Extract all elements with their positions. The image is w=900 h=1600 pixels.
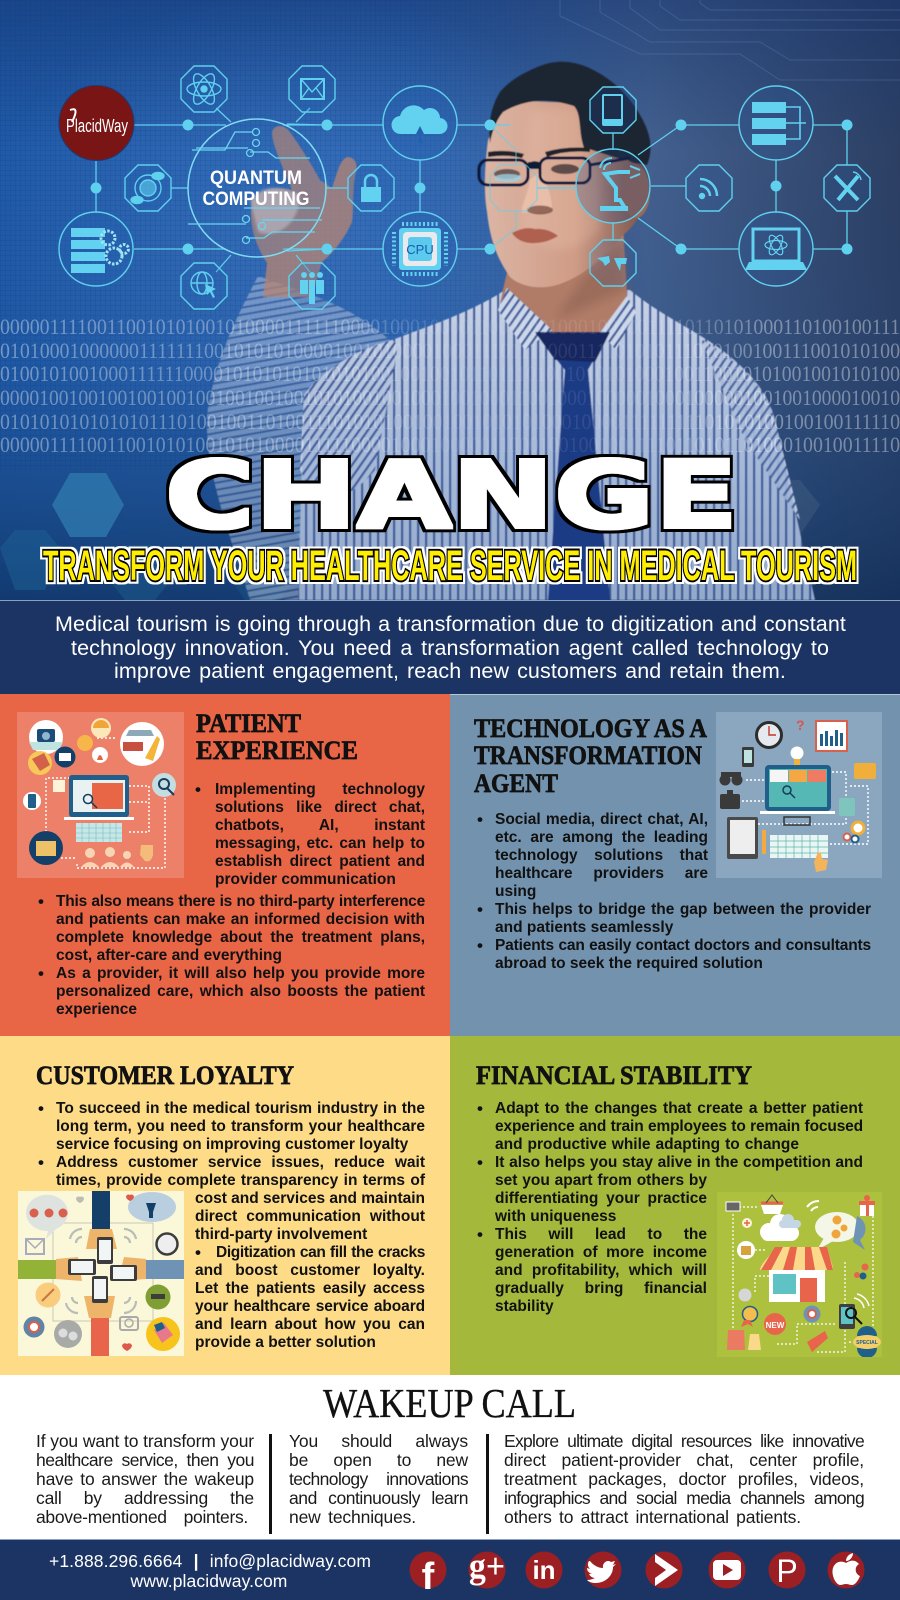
bullet text: provide a better solution [195,1334,376,1351]
bullet text: • [195,1243,201,1262]
text column 2: new techniques. [289,1507,416,1527]
nose [522,172,552,213]
eyes [494,169,520,179]
icon: facebook: f [422,1556,435,1598]
heading: technology as a transformation agent: TRANSFORMATION [474,741,702,770]
ear [622,166,650,218]
text column 3: infographics and social media channels among [504,1488,864,1508]
bullet text: This also means there is no third-party interference [56,893,425,910]
icon: cloud circle [383,86,457,160]
bullet text: establish direct patient and [215,853,425,870]
bullet text: personalized care, which also boosts the patient [56,983,425,1000]
bullet text: This will lead to the [495,1226,707,1243]
bullet text: and productive while adapting to change [495,1136,799,1153]
text column 2: be open to new [289,1450,468,1470]
intro band: Medical tourism is going through a transformation due to digitization and constant [55,612,846,636]
text column 2: You should always [289,1430,468,1450]
bullet text: and patients can make an informed decision with [56,911,425,928]
illustration: shop: SPECIAL [856,1340,878,1346]
panel: patient experience: • [38,892,44,911]
panel: customer loyalty [0,1036,450,1375]
panel: customer loyalty: • [38,1099,44,1118]
hexagon pattern [0,473,820,600]
panel: customer loyalty: • [38,1153,44,1172]
panel: financial stability [450,1036,900,1375]
bullet text: Implementing technology [215,781,425,798]
logo: PlacidWay: PlacidWay [66,116,128,136]
icon: twitter [587,1561,616,1583]
heading: patient experience: PATIENT [196,709,301,738]
panel: patient experience: • [195,780,201,799]
illustration: travel laptop [17,712,184,878]
text column 3: Explore ultimate digital resources like innovative [504,1430,864,1450]
text column 3: direct patient-provider chat, center profile, [504,1450,864,1470]
icon: mail [289,66,335,112]
bullet text: This helps to bridge the gap between the provider [495,901,871,918]
contact details: www.placidway.com [130,1571,287,1591]
bullet text: and patients seamlessly [495,919,673,936]
bullet text: and boost customer loyalty. [195,1262,425,1279]
bullet text: abroad to seek the required solution [495,955,763,972]
divider [486,1434,489,1534]
hand [251,126,357,297]
bullet text: To succeed in the medical tourism industry in the [56,1100,425,1117]
bullet text: generation of more income [495,1244,707,1261]
intro band [0,600,900,694]
text column 1: have to answer the wakeup [36,1469,254,1489]
bullet text: and profitability, which will [495,1262,707,1279]
bullet text: and learn about how you can [195,1316,425,1333]
icon: google plus: g+ [469,1546,505,1586]
icon: atom [181,66,227,112]
logo: PlacidWay [59,86,134,160]
bullet text: service focusing on improving customer loyalty [56,1136,408,1153]
bullet text [477,900,871,972]
social icons [410,1546,864,1598]
heading: financial stability: FINANCIAL STABILITY [476,1061,752,1090]
icon: linkedin: in [532,1555,556,1585]
contact details [49,1551,371,1591]
icon: globe cursor [181,263,227,309]
panel: patient experience [0,694,450,1036]
panel: technology as a transformation agent: • [477,810,483,829]
bullet text: experience and train employees to remain focused [495,1118,863,1135]
bullet text: stability [495,1298,554,1315]
bullet text [477,1099,863,1172]
panel: technology as a transformation agent: • [477,900,483,919]
illustration: technology workspace: ? [796,717,805,733]
icon: people [289,263,335,309]
contact details: +1.888.296.6664 | info@placidway.com [49,1551,371,1571]
panel: patient experience: • [38,964,44,983]
illustration: shop: NEW [766,1321,785,1330]
quantum computing circle [188,119,326,257]
panel: financial stability: • [477,1225,483,1244]
footer [0,1539,900,1600]
bullet text: healthcare providers are [495,865,708,882]
bullet text: with uniqueness [495,1208,616,1225]
binary code rows [0,314,900,457]
bullet text: gradually bring financial [495,1280,707,1297]
bullet text [38,892,425,1018]
icon: pinterest: P [776,1553,798,1589]
quantum computing circle: QUANTUM [210,168,302,189]
panel: financial stability: • [477,1099,483,1118]
text column 1: If you want to transform your [36,1430,254,1450]
text column 2 [289,1430,468,1527]
icon: cloud globe [125,165,171,211]
bullet text: times, provide complete transparency in terms of [56,1172,425,1189]
bullet text [195,1190,425,1351]
tie [535,332,610,600]
title: CHANGE: CHANGE [165,442,738,549]
intro band: improve patient engagement, reach new customers and retain them. [114,659,786,683]
bullet text: cost and services and maintain [195,1190,425,1207]
text column 1 [36,1430,254,1527]
bullet text: solutions like direct chat, [215,799,425,816]
bullet text: using [495,883,536,900]
bullet text [38,1099,426,1189]
hair [489,62,651,165]
hero illustration [0,0,900,600]
eyebrows [488,151,524,158]
icon: wifi [686,165,732,211]
icon: cpu circle: CPU [406,242,434,257]
bullet text [477,1172,707,1315]
bullet text: technology solutions that [495,847,708,864]
icon: apple [832,1553,860,1585]
icon: padlock [348,165,394,211]
divider [269,1434,272,1534]
heading: technology as a transformation agent [474,714,708,798]
bullet text: messaging, etc. can help to [215,835,425,852]
text column 3: treatment packages, doctor profiles, videos, [504,1469,864,1489]
octagon icon group [125,66,870,309]
heading: technology as a transformation agent: AGENT [474,769,558,798]
bullet text: experience [56,1001,137,1018]
bullet text: Adapt to the changes that create a better patient [495,1100,863,1117]
collar [498,288,552,350]
bullet text: third-party involvement [195,1226,367,1243]
heading: patient experience [196,709,358,765]
text column 3 [504,1430,864,1527]
heading: customer loyalty: CUSTOMER LOYALTY [36,1061,294,1090]
icon: robot arm circle [576,149,650,223]
heading: technology as a transformation agent: TECHNOLOGY AS A [474,714,707,743]
icon: server stack circle [739,86,813,160]
bullet text: Patients can easily contact doctors and consultants [495,937,871,954]
bullet text: Social media, direct chat, AI, [495,811,708,828]
man figure [207,62,815,600]
bullet text [477,810,708,900]
connector lines [96,108,847,272]
bullet text [195,780,425,888]
network dots [90,120,852,254]
bullet text: It also helps you stay alive in the competition and [495,1154,863,1171]
text column 1: call by addressing the [36,1488,254,1508]
bullet text: etc. are among the leading [495,829,708,846]
bullet text: complete knowledge about the treatment plans, [56,929,425,946]
bullet text: Address customer service issues, reduce wait [56,1154,425,1171]
icon: smartphone [590,87,636,133]
raised sleeve [207,276,392,600]
icon: play store [655,1554,678,1586]
illustration: connected hands [18,1191,184,1356]
head [485,100,648,287]
panel: financial stability: • [477,1153,483,1172]
text column 2: and continuously learn [289,1488,468,1508]
shirt [298,290,815,600]
text column 3: others to attract international patients. [504,1507,801,1527]
lips [512,228,558,243]
panel: technology as a transformation agent [450,694,900,1036]
text column 1: healthcare service, then you [36,1450,254,1470]
quantum computing circle: COMPUTING [202,189,310,210]
bullet text: Let the patients easily access [195,1280,425,1297]
text column 2: technology innovations [289,1469,468,1489]
intro band: technology innovation. You need a transformation agent called technology to [71,636,829,660]
bullet text: set you apart from others by [495,1172,707,1189]
icon: laptop atom circle [739,212,813,286]
technology network [96,108,847,272]
bullet text: provider communication [215,871,396,888]
bullet text: chatbots, AI, instant [215,817,425,834]
heading: patient experience: EXPERIENCE [196,736,358,765]
bullet text: cost, after-care and everything [56,947,282,964]
illustration: shop [717,1192,882,1357]
icon: tools [824,165,870,211]
icon: cpu circle [383,212,457,286]
bullet text: direct communication without [195,1208,425,1225]
illustration: technology workspace [716,712,882,878]
icon: world map [590,240,636,286]
bullet text: differentiating your practice [495,1190,707,1207]
panel: technology as a transformation agent: • [477,936,483,955]
icon: server gears circle [59,212,133,286]
glasses [479,158,630,185]
bullet text: long term, you need to transform your healthcare [56,1118,425,1135]
bullet text: Digitization can fill the cracks [216,1244,425,1261]
bullet text: As a provider, it will also help you provide more [56,965,425,982]
neck [500,225,627,335]
text column 1: above-mentioned pointers. [36,1507,248,1527]
icon: youtube [713,1560,741,1580]
bullet text: your healthcare service aboard [195,1298,425,1315]
